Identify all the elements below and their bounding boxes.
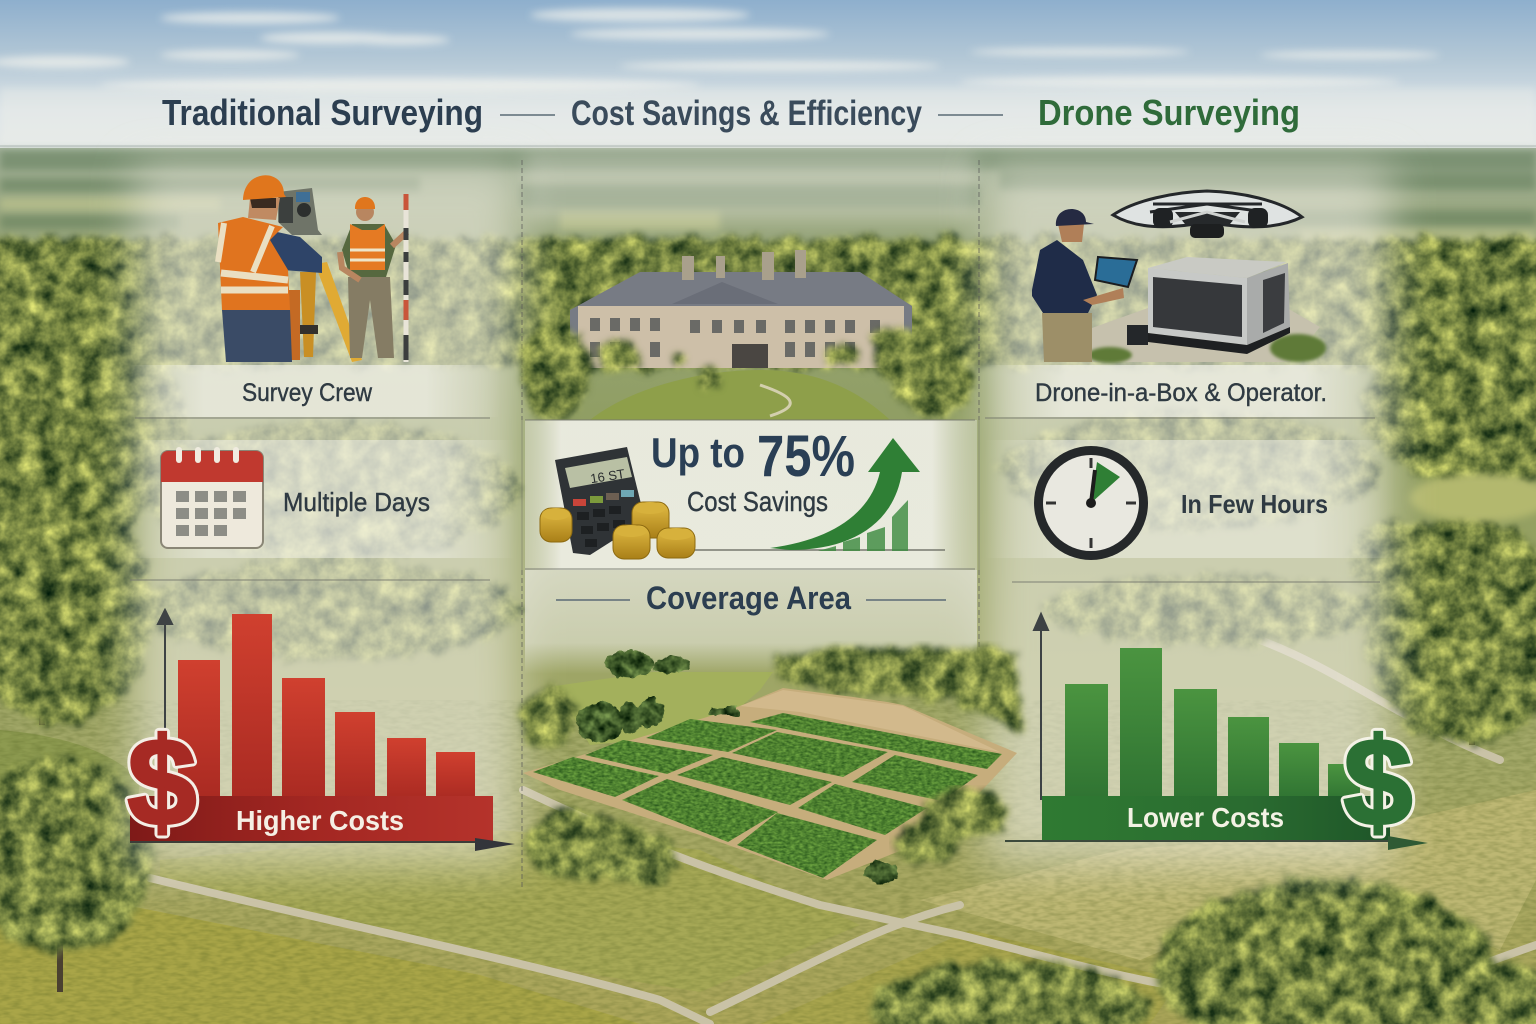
header connectors (500, 114, 1003, 116)
distant trees (606, 650, 690, 678)
callout: Up to 75% (651, 424, 855, 489)
pad (1092, 308, 1320, 362)
dashed column dividers (522, 160, 979, 890)
shrub (1088, 334, 1326, 363)
heading: Cost Savings & Efficiency: Cost Savings & Efficiency (571, 94, 922, 133)
crop plots (533, 713, 1002, 878)
icon: green dollar: $ (1344, 714, 1412, 852)
heading: Traditional Surveying: Traditional Surveying (162, 92, 483, 133)
clouds (0, 8, 1440, 92)
row band: survey crew label (130, 365, 500, 417)
bottom fields (0, 730, 1536, 1024)
label: Drone-in-a-Box & Operator: Drone-in-a-Box & Operator. (1035, 379, 1327, 407)
header rule (0, 145, 1536, 147)
left grove (520, 686, 676, 888)
banner: Higher Costs: Higher Costs (236, 805, 404, 836)
chart: lower costs bars (1034, 614, 1360, 800)
total station (278, 188, 322, 235)
icon: green dollar: $ (1344, 714, 1412, 852)
mansion lawn (590, 370, 890, 420)
tripod (288, 262, 362, 362)
tree trunks (42, 640, 1472, 992)
coverage connectors (556, 599, 946, 601)
heading: Drone Surveying: Drone Surveying (1038, 92, 1300, 133)
mansion driveway (760, 385, 790, 416)
axis arrow (158, 610, 172, 740)
label: Multiple Days: Multiple Days (283, 487, 430, 517)
callout: Up to 75%: 75% (757, 424, 855, 489)
pale field right (1410, 474, 1536, 522)
panel: cost savings (525, 420, 977, 570)
row band: drone label (985, 365, 1385, 417)
pale distant fields (0, 198, 1536, 314)
docking box (1127, 257, 1290, 354)
icon: red dollar: $ (128, 714, 196, 852)
illustration: mansion (570, 250, 912, 368)
label: Cost Savings: Cost Savings (687, 486, 828, 517)
sky (0, 0, 1536, 148)
evergreen trees (576, 698, 740, 742)
haze veil: header band (0, 88, 1536, 146)
icon: drone and box with operator (1032, 191, 1326, 363)
banner: Higher Costs (130, 796, 515, 851)
label: Survey Crew: Survey Crew (242, 379, 373, 407)
callout: Up to 75%: Up to (651, 429, 745, 476)
banner: Lower Costs (1005, 796, 1428, 850)
haze veil: right column (985, 165, 1390, 865)
upper meadow (555, 672, 773, 745)
icon: calculator: 16 ST (589, 466, 626, 486)
bars (1065, 648, 1360, 800)
icon: calculator (555, 447, 645, 555)
icon: stopwatch clock (1034, 446, 1148, 560)
dirt ground (523, 688, 1017, 880)
ranging pole (404, 194, 408, 362)
icon: growth arrow (695, 438, 945, 551)
axis arrow (1034, 614, 1048, 800)
chart: higher costs bars (158, 610, 475, 800)
banner: Lower Costs: Lower Costs (1127, 802, 1284, 833)
heading: Coverage Area: Coverage Area (646, 580, 851, 616)
mansion trees (521, 322, 975, 420)
icon: survey crew (218, 175, 407, 362)
small bush (865, 861, 899, 883)
bars (178, 614, 475, 800)
haze veil: middle column (525, 150, 975, 220)
dirt roads (150, 640, 1536, 1024)
row band: time left (130, 440, 515, 558)
operator (1032, 209, 1124, 362)
dividers (130, 418, 1380, 582)
tree line behind field (773, 645, 1025, 735)
drone (1113, 191, 1302, 238)
row band: time right (985, 440, 1395, 558)
assistant (340, 197, 407, 358)
label: In Few Hours: In Few Hours (1181, 489, 1328, 519)
icon: red dollar: $ (128, 714, 196, 852)
haze veil: left column (135, 165, 520, 865)
panel: coverage area band (525, 570, 977, 674)
laptop (1095, 257, 1137, 287)
right grove (895, 789, 1009, 866)
grass texture (0, 700, 1536, 1024)
illustration: crop field (520, 645, 1025, 888)
surveyor (218, 175, 322, 362)
tree masses (0, 238, 1536, 1024)
icon: gold coins (540, 502, 695, 559)
distant tree lines (0, 150, 1536, 229)
icon: calendar (161, 447, 263, 548)
